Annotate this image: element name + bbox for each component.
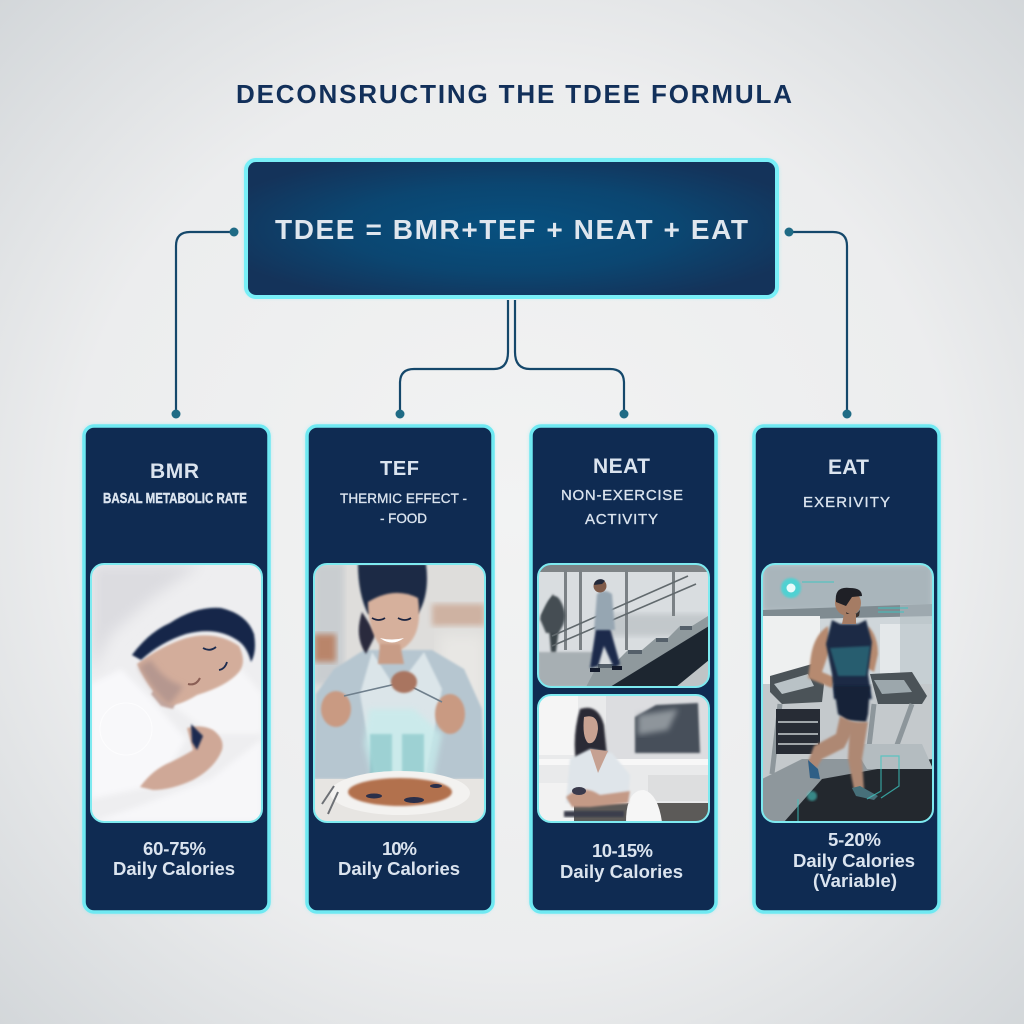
stat: TEF share <box>338 838 460 879</box>
stat: BMR share: 60-75% <box>143 838 206 859</box>
formula text: TDEE = BMR+TEF + NEAT + EAT <box>275 214 748 245</box>
connector: formula to NEAT <box>515 300 628 418</box>
subheading: thermic effect of food <box>340 491 467 526</box>
photo: man climbing stairs <box>538 564 709 687</box>
stat: NEAT share <box>560 840 683 882</box>
stat: EAT share: Daily Calories <box>793 850 915 871</box>
subheading: exerivity: EXERIVITY <box>803 494 890 511</box>
photo: man on treadmill <box>762 564 933 823</box>
stat: EAT share: 5-20% <box>828 829 881 850</box>
panel: NEAT <box>530 425 717 913</box>
stat: BMR share: Daily Calories <box>113 858 235 879</box>
title: DECONSRUCTING THE TDEE FORMULA <box>236 79 792 109</box>
heading: EAT: EAT <box>828 456 869 479</box>
formula box <box>245 160 778 297</box>
heading: TEF: TEF <box>380 458 419 480</box>
photo: woman sleeping <box>91 564 262 822</box>
subheading: thermic effect of food: THERMIC EFFECT - <box>340 491 467 506</box>
subheading: non-exercise activity: NON-EXERCISE <box>561 487 683 504</box>
subheading: non-exercise activity: ACTIVITY <box>585 511 658 528</box>
photo: woman eating <box>314 564 485 822</box>
panel: TEF <box>306 425 493 913</box>
stat: NEAT share: 10-15% <box>592 840 653 861</box>
photo: woman seated <box>538 695 709 822</box>
heading: NEAT: NEAT <box>593 455 650 478</box>
subheading: non-exercise activity <box>561 487 683 528</box>
panel: BMR <box>83 425 270 913</box>
subheading: basal metabolic rate: BASAL METABOLIC RATE <box>103 490 247 507</box>
subheading: thermic effect of food: - FOOD <box>380 511 427 526</box>
stat: NEAT share: Daily Calories <box>560 861 683 882</box>
stat: EAT share <box>793 829 915 891</box>
connector: formula to BMR <box>172 228 238 418</box>
connector: formula to TEF <box>396 300 508 418</box>
stat: TEF share: 10% <box>382 838 417 859</box>
panel: EAT <box>753 425 940 913</box>
stat: EAT share: (Variable) <box>813 870 897 891</box>
stat: BMR share <box>113 838 235 879</box>
heading: BMR: BMR <box>150 460 199 483</box>
connector: formula to EAT <box>784 228 852 418</box>
stat: TEF share: Daily Calories <box>338 858 460 879</box>
